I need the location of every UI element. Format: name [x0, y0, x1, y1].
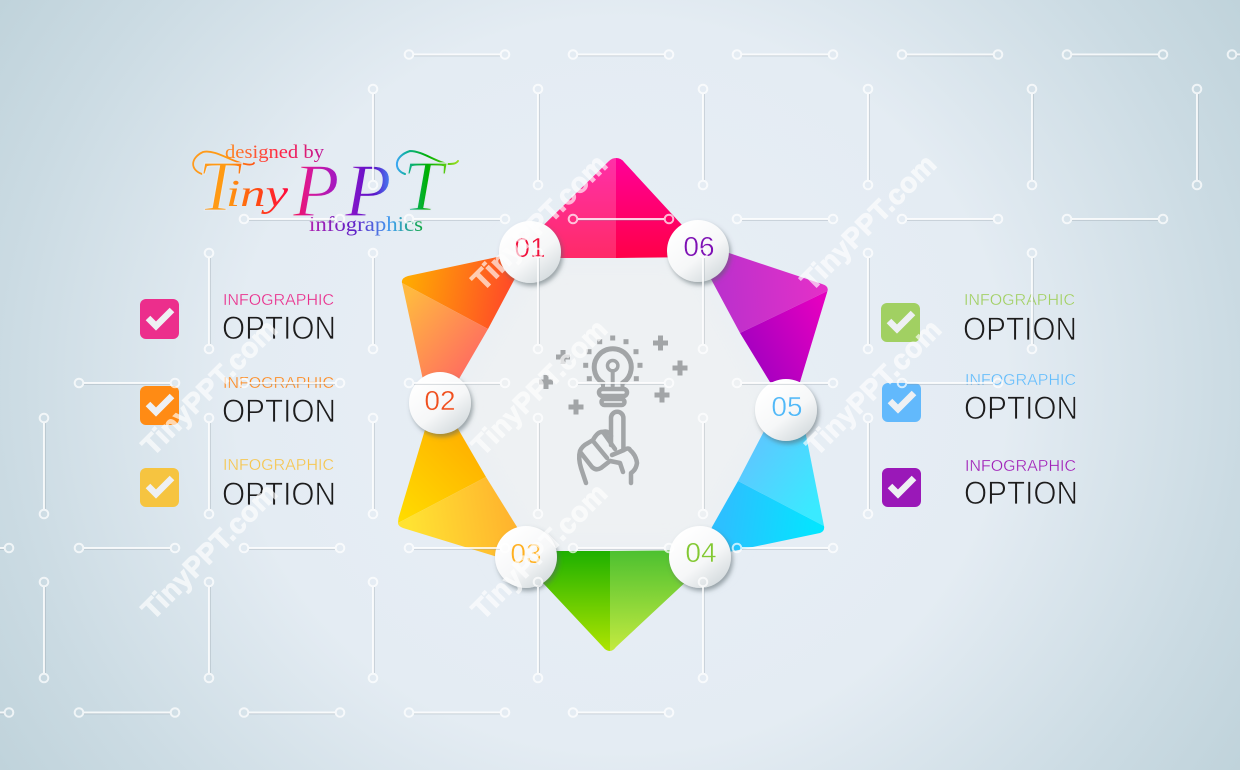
- logo: infographics: infographics: [309, 212, 423, 236]
- watermarks: TinyPPT.com: [465, 148, 613, 296]
- icon: light bulb and pointing hand: [539, 336, 688, 483]
- option: purple: [882, 458, 1078, 511]
- logo: designed by TinyPPT infographics: [193, 142, 458, 236]
- logo: PPT: T: [403, 146, 448, 226]
- left options: [140, 292, 336, 512]
- option: orange: INFOGRAPHIC: [223, 375, 334, 392]
- option: pink: OPTION: [222, 310, 336, 346]
- icon: bulb: [594, 349, 631, 405]
- icon: bulb rays: [583, 336, 642, 381]
- watermarks: TinyPPT.com: [465, 477, 613, 625]
- watermarks: TinyPPT.com: [135, 477, 283, 625]
- option: orange: OPTION: [222, 393, 336, 429]
- watermarks: TinyPPT.com: [465, 313, 613, 461]
- number badge 03: 03: [510, 538, 542, 569]
- icon: hand: [579, 412, 637, 483]
- inner ring area: [440, 251, 786, 557]
- option: pink: INFOGRAPHIC: [223, 292, 334, 309]
- number badge 02: 02: [424, 385, 456, 416]
- petal: orange upper left: [402, 250, 530, 403]
- logo: PPT: P: [344, 149, 391, 233]
- logo: PPT: [292, 146, 448, 233]
- checkbox: [882, 468, 921, 507]
- option: yellow: INFOGRAPHIC: [223, 457, 334, 474]
- option: purple: OPTION: [964, 475, 1078, 511]
- petal: pink top: [510, 158, 705, 258]
- option: yellow: [140, 457, 336, 512]
- watermarks: TinyPPT.com: [135, 313, 283, 461]
- watermarks: TinyPPT.com: [799, 313, 947, 461]
- petal: purple upper right: [690, 240, 828, 410]
- right options: [881, 292, 1078, 511]
- icon: plus signs: [539, 336, 688, 414]
- option: pink: [140, 292, 336, 346]
- petal ring diagram: [398, 158, 828, 651]
- checkbox: [882, 383, 921, 422]
- checkbox: [140, 468, 179, 507]
- option: purple: INFOGRAPHIC: [965, 458, 1076, 475]
- number badge 04: 04: [685, 537, 717, 568]
- number badge 01: 01: [514, 232, 546, 263]
- option: green: OPTION: [963, 311, 1077, 347]
- checkbox: [140, 386, 179, 425]
- option: green: INFOGRAPHIC: [964, 292, 1075, 309]
- checkbox: [881, 303, 920, 342]
- logo: PPT: P: [292, 149, 339, 233]
- option: blue: [882, 372, 1078, 426]
- logo: Tiny: [198, 146, 288, 226]
- logo: flourish strokes: [193, 151, 458, 174]
- petal: blue lower right: [700, 410, 824, 558]
- number badge 05: [755, 379, 817, 441]
- number badge 01: [499, 221, 561, 283]
- number badge 05: 05: [771, 391, 803, 422]
- option: green: [881, 292, 1077, 347]
- option: yellow: OPTION: [222, 476, 336, 512]
- logo: Tiny: T: [198, 146, 243, 226]
- number badge 06: [667, 220, 729, 282]
- watermarks: TinyPPT.com: [794, 148, 942, 296]
- number badge 04: [669, 526, 731, 588]
- logo: Tiny: iny: [226, 173, 288, 215]
- logo: designed by: designed by: [225, 142, 325, 163]
- number badge 06: 06: [683, 231, 715, 262]
- option: blue: INFOGRAPHIC: [965, 372, 1076, 389]
- number badge 02: [409, 372, 471, 434]
- watermarks: [135, 148, 947, 625]
- checkbox: [140, 299, 179, 339]
- number badge 03: [495, 526, 557, 588]
- option: orange: [140, 375, 336, 429]
- petal: yellow lower left: [398, 403, 530, 567]
- option: blue: OPTION: [964, 390, 1078, 426]
- petal: green bottom: [513, 550, 720, 651]
